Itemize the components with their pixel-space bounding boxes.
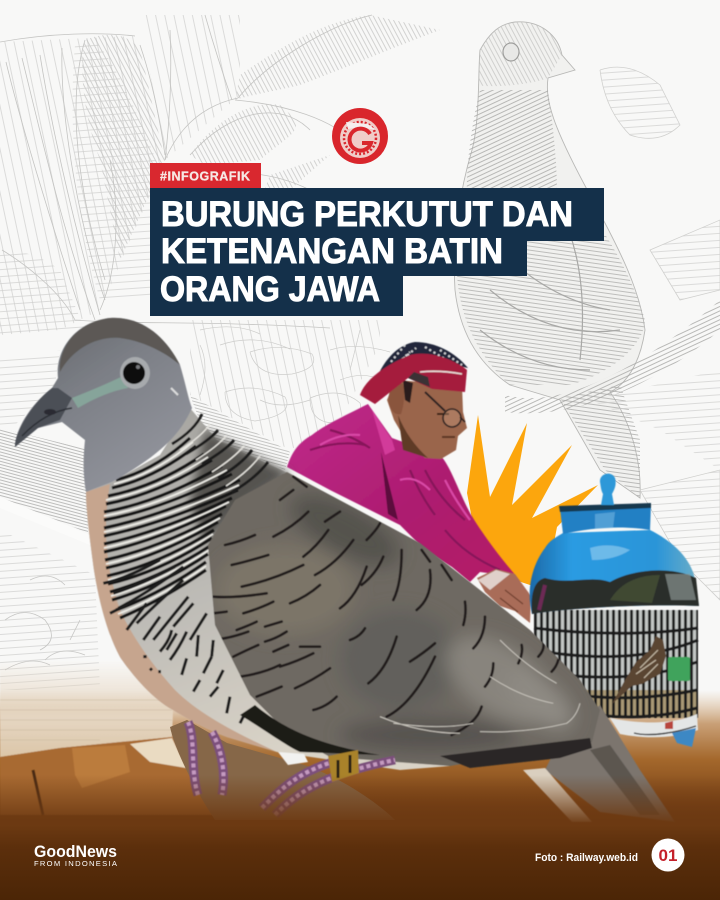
- background: engraved wing and foliage behind dove: [0, 350, 290, 690]
- dove: feet: [188, 722, 395, 815]
- page number: 01: [659, 846, 677, 865]
- title: KETENANGAN BATIN: [161, 232, 503, 271]
- man: face: [387, 380, 467, 459]
- dove: [15, 318, 675, 822]
- dove: belly and chest base: [86, 408, 450, 770]
- bird cage: [530, 474, 699, 747]
- wooden plank: [0, 660, 240, 815]
- title: BURUNG PERKUTUT DAN: [161, 195, 573, 234]
- dove: primary feathers: [440, 738, 592, 768]
- dove: feather markings: [213, 477, 580, 735]
- dove: leg ring: [328, 750, 359, 782]
- man: shirt: [287, 404, 517, 582]
- cage: bars: [534, 610, 698, 718]
- dove: eye: [120, 357, 150, 389]
- cage: base: [610, 714, 698, 737]
- man: hand: [477, 569, 531, 623]
- background: engraved dove: [454, 22, 720, 600]
- background: engraved leaves: [0, 15, 440, 450]
- title: [150, 188, 604, 316]
- dove: wing colour patches: [213, 477, 583, 751]
- starburst: [467, 415, 598, 590]
- dove: teal eye patch: [72, 375, 128, 408]
- dove: pink breast edge: [86, 484, 277, 752]
- dove: wing: [208, 472, 600, 766]
- dove: crown: [60, 318, 180, 372]
- cage: jar dome: [530, 530, 699, 614]
- cage: small bird: [612, 636, 666, 704]
- photo credit: Foto : Railway.web.id: [535, 852, 638, 864]
- perch branch: [170, 720, 395, 820]
- logo: [332, 108, 388, 164]
- man: dark batik headcloth: [372, 342, 468, 395]
- cage: green feeder: [668, 657, 690, 681]
- title: ORANG JAWA: [160, 270, 380, 309]
- man: red headband: [360, 354, 467, 404]
- dove: neck grey: [15, 318, 192, 492]
- cage: jar reflection: [532, 570, 699, 614]
- ground gradient: [0, 690, 720, 900]
- bottom fade: [0, 775, 720, 825]
- dove: dark nape patch: [190, 430, 290, 545]
- brand: GoodNews from Indonesia: FROM INDONESIA: [34, 859, 118, 868]
- brand: GoodNews from Indonesia: GoodNews: [34, 842, 117, 861]
- cage: knob: [600, 474, 616, 505]
- dove: beak: [15, 388, 72, 447]
- man: glasses: [425, 392, 465, 427]
- dove: chest stripes: [103, 414, 284, 723]
- tag: infografik: [150, 163, 261, 189]
- tag: infografik: #INFOGRAFIK: [160, 170, 250, 184]
- dove: under-wing dark fringe: [240, 705, 380, 755]
- dove: tail: [545, 705, 675, 822]
- man: [287, 342, 531, 623]
- page number: [652, 838, 684, 872]
